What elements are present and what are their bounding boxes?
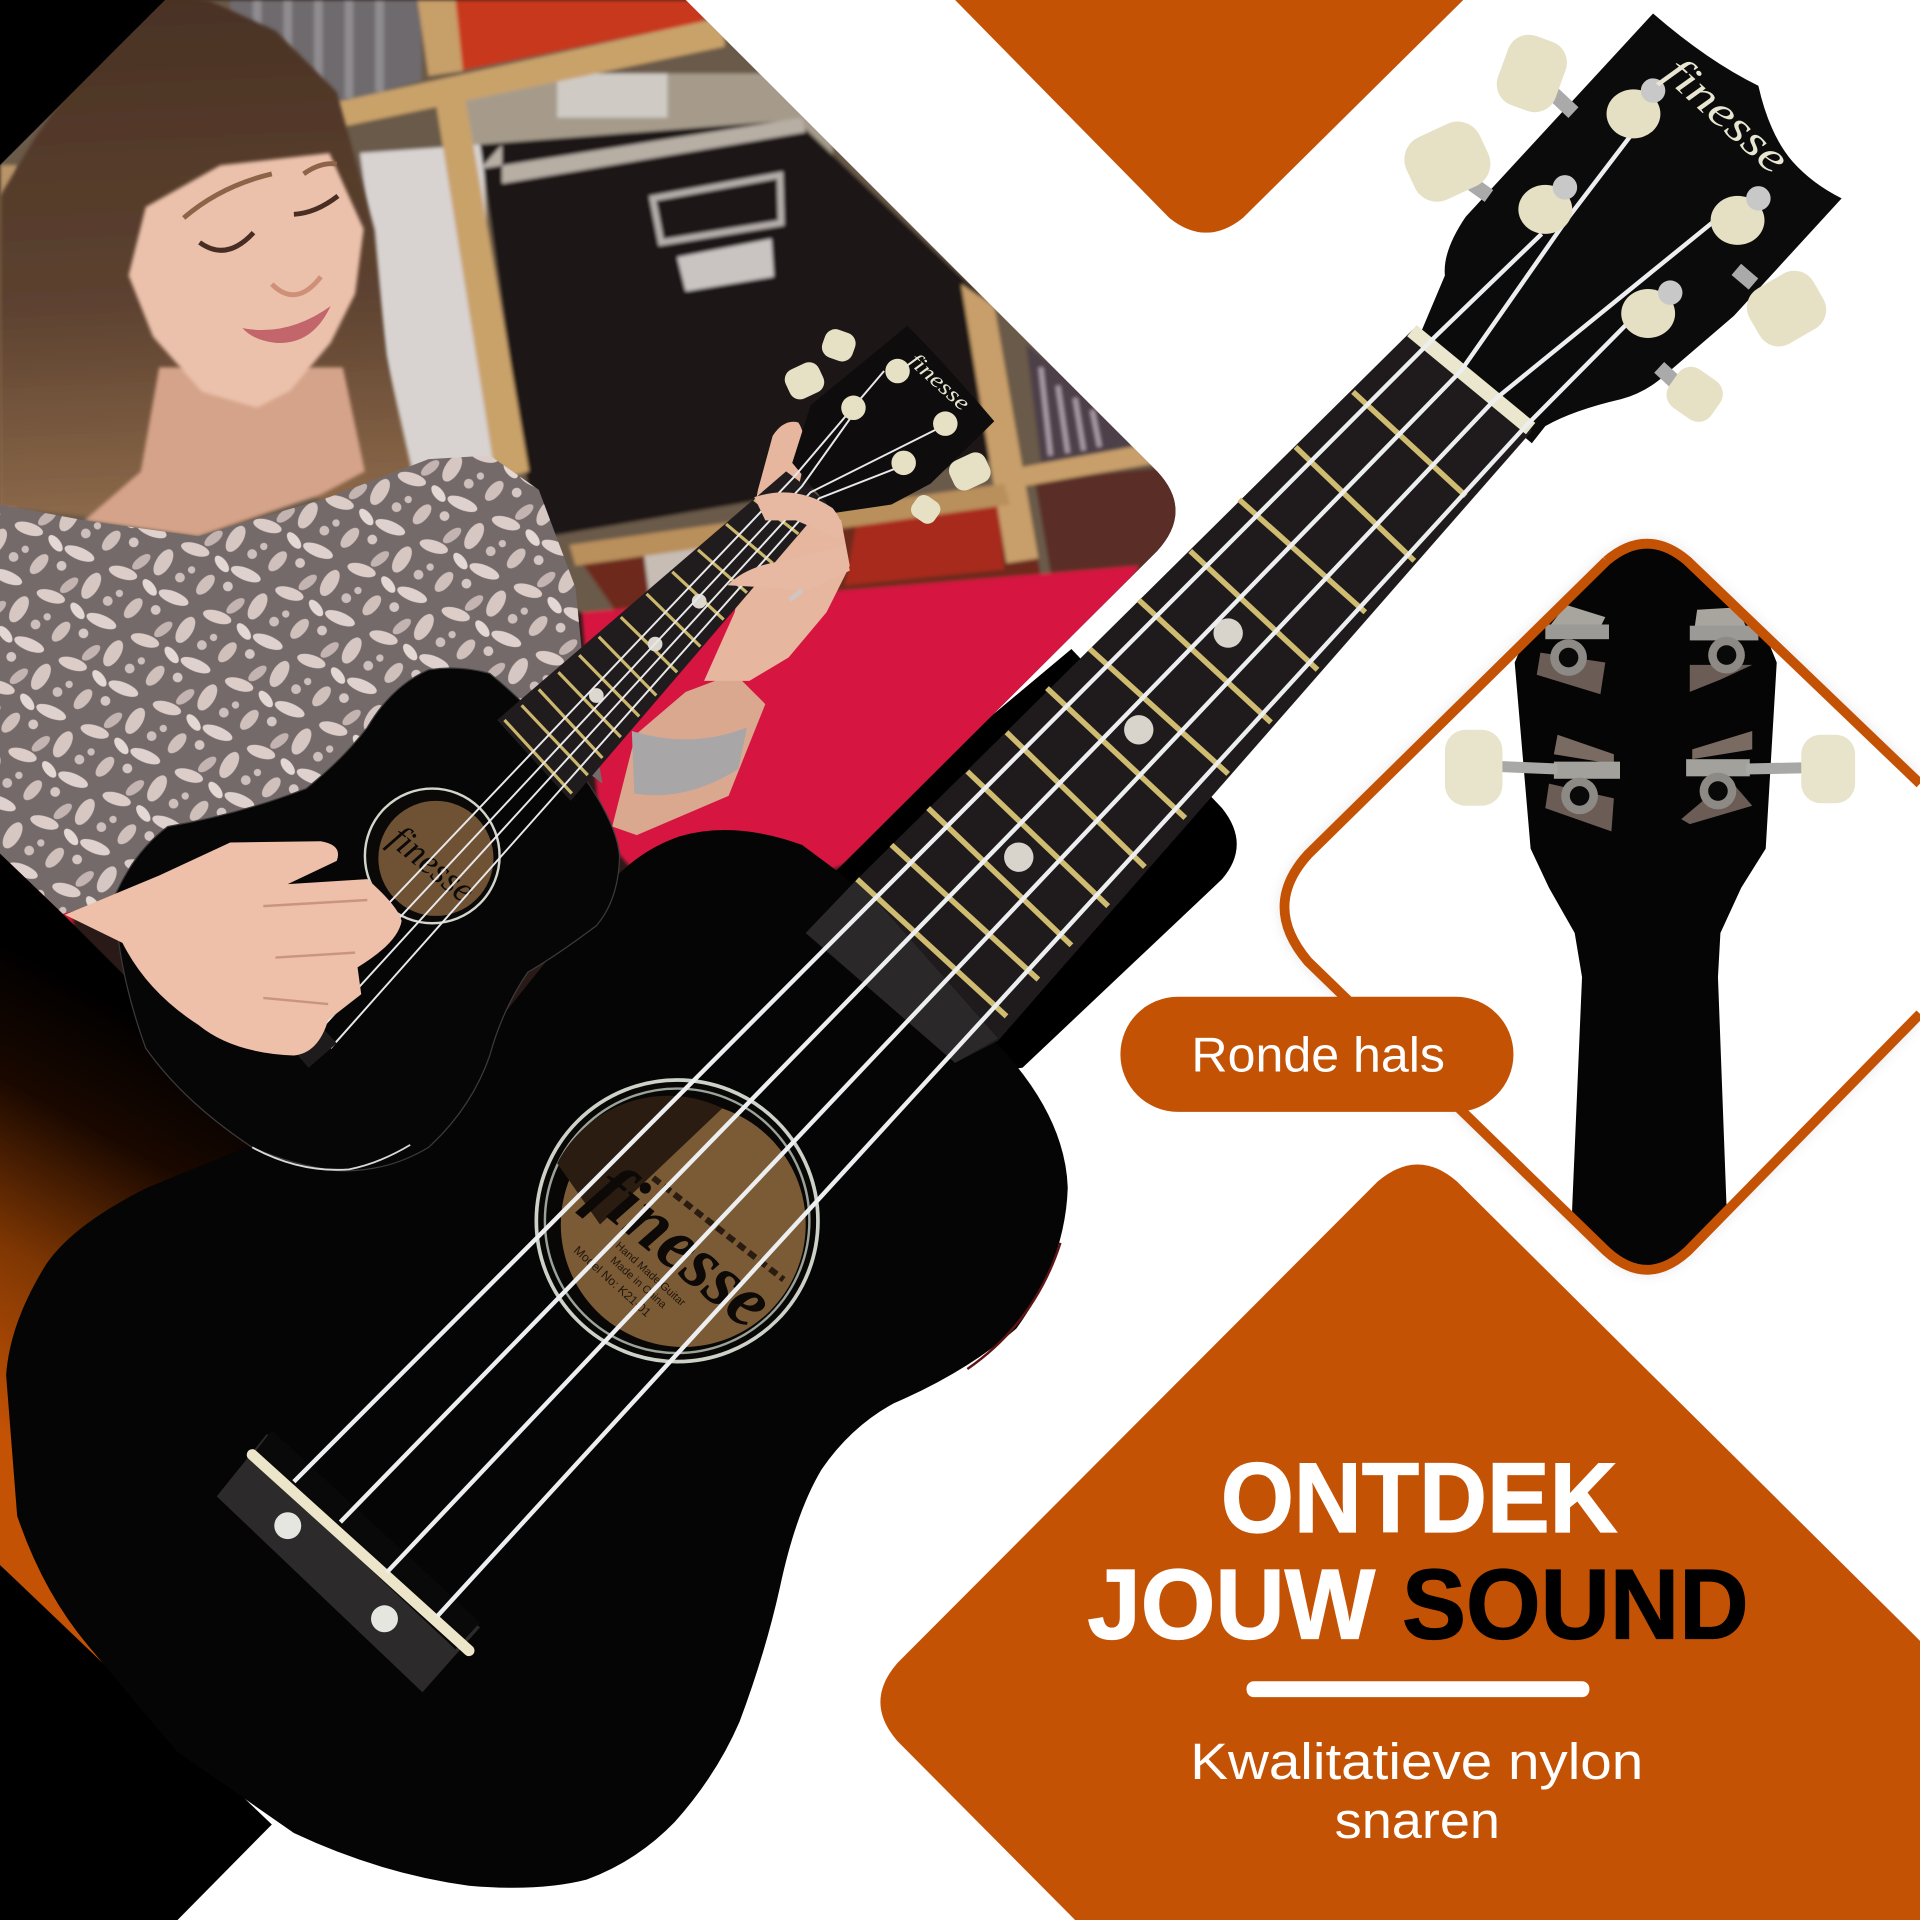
headstock (1409, 13, 1842, 443)
fretting hand palm (704, 422, 850, 681)
photo: woman playing the ukulele (0, 0, 1176, 1010)
small fretboard (497, 471, 827, 801)
forearm and bracelets (612, 673, 765, 835)
small frets (504, 500, 798, 793)
soundhole (536, 1080, 818, 1362)
callout: Ronde hals: Ronde hals (1191, 1028, 1445, 1082)
subheading line 2: snaren (1335, 1791, 1500, 1849)
position dots (1004, 618, 1243, 872)
panel shadow (1284, 544, 1920, 1270)
tuner buttons (1445, 730, 1502, 806)
panel: round neck detail (1284, 539, 1920, 1298)
soundhole small print (571, 1240, 688, 1320)
heading line 2: JOUW SOUND (1087, 1549, 1749, 1660)
strumming hand (65, 841, 402, 1056)
headstock logo: finesse (1655, 47, 1799, 183)
subheading line 1: Kwalitatieve nylon (1190, 1732, 1643, 1790)
facial features (184, 164, 338, 343)
small headstock (792, 326, 994, 513)
orange to black glow background (0, 784, 637, 1714)
soundhole label: finesse (575, 1148, 789, 1344)
frets (857, 392, 1466, 1016)
small body (115, 668, 620, 1171)
back of headstock and neck (1445, 539, 1855, 1298)
lace dress (0, 456, 602, 916)
strings (294, 118, 1724, 1616)
heading line 1: ONTDEK (1221, 1443, 1618, 1554)
tuner shafts (1500, 767, 1806, 769)
small soundhole: finesse (382, 817, 484, 910)
small soundhole (365, 789, 500, 923)
small saddle (294, 1026, 337, 1068)
top orange diamond (955, 0, 1463, 233)
fretboard (806, 328, 1532, 1063)
fretboard end block (806, 879, 998, 1063)
nut (1412, 331, 1531, 429)
shelving background (0, 0, 1224, 931)
panel: headline diamond (880, 1164, 1920, 1920)
small position dots (589, 594, 707, 703)
soundhole small print: Made in China (608, 1255, 669, 1312)
bridge (217, 1430, 480, 1692)
black corner upper left (0, 0, 165, 165)
black diamond behind neck (735, 649, 1237, 1102)
fretting fingers (727, 492, 850, 600)
hair (0, 0, 414, 518)
body (6, 830, 1068, 1888)
soundhole small print: Hand Made Guitar (613, 1240, 688, 1309)
callout: Ronde hals (1120, 997, 1513, 1112)
divider bar (1247, 1681, 1589, 1697)
small pegs (781, 326, 994, 527)
ukulele held by the woman (115, 326, 994, 1171)
panel orange outline (1284, 544, 1920, 1270)
neck and chest (84, 367, 365, 536)
soundhole small print: Model No: K21-01 (571, 1243, 654, 1320)
small strings (276, 371, 943, 1048)
tuning pegs (1396, 28, 1834, 428)
black corner lower left (0, 1565, 272, 1920)
face (129, 153, 364, 408)
tuner plates (1537, 605, 1758, 831)
small headstock logo: finesse (904, 348, 976, 416)
